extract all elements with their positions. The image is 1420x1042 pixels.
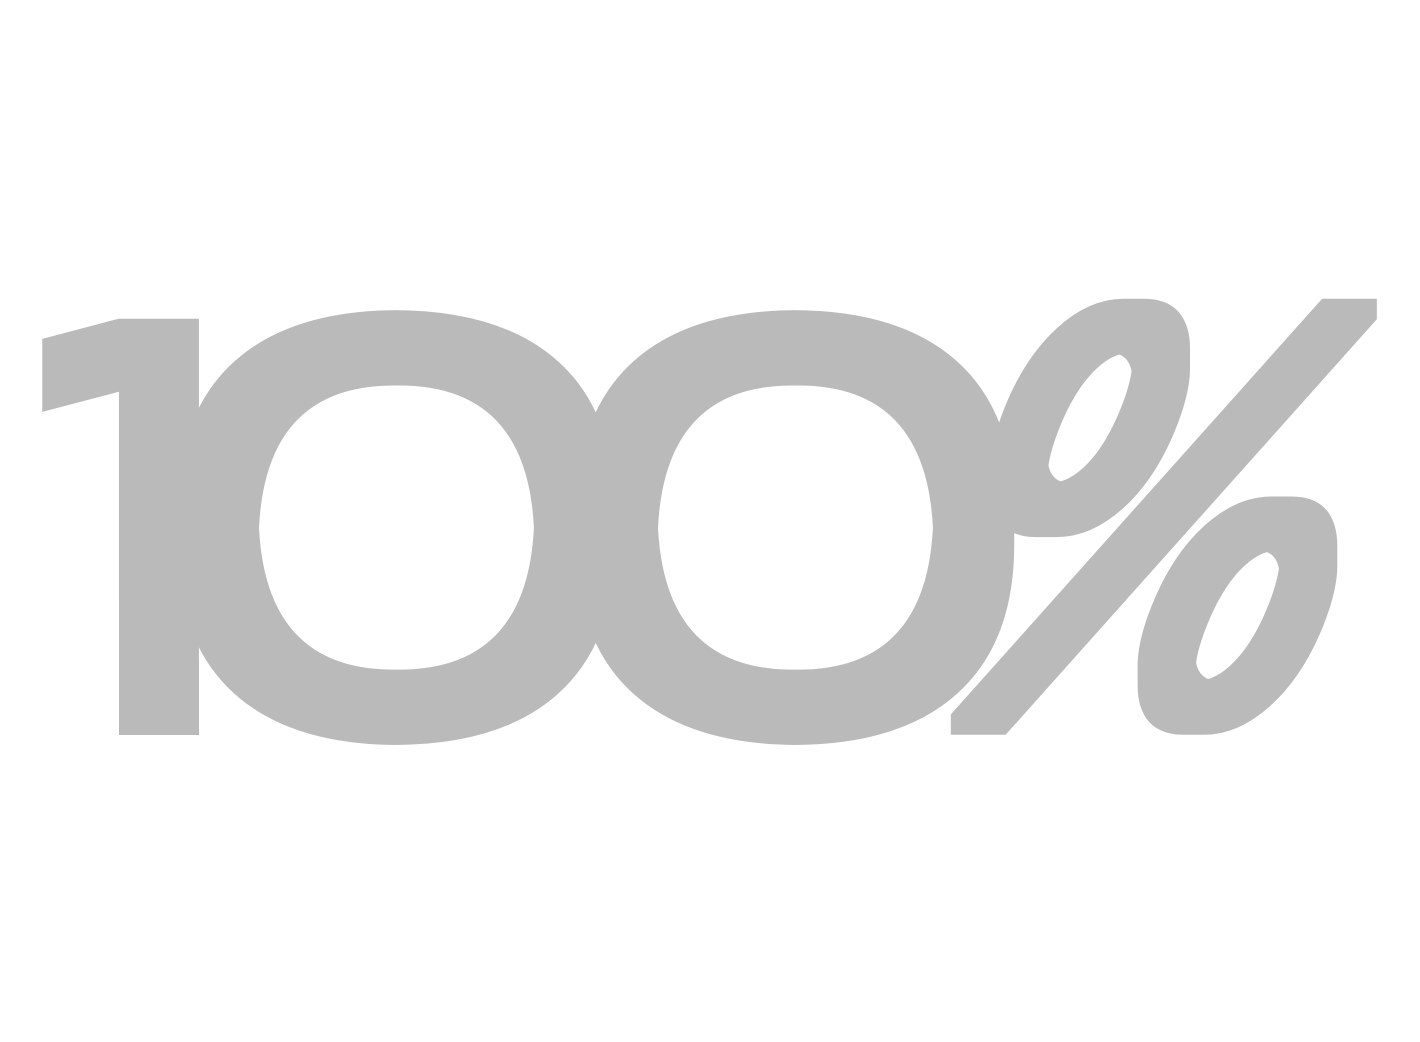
title: 100% wordmark (42, 298, 1378, 745)
digit: one: 1 (0, 206, 305, 871)
digit: first zero: 0 (116, 229, 677, 846)
digit: second zero: 0 (515, 229, 1076, 846)
